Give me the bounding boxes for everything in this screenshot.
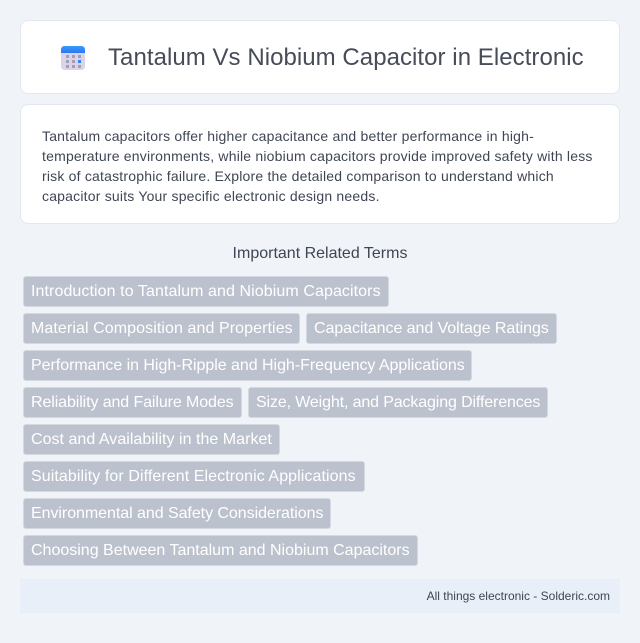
tag [23, 424, 280, 455]
tag [23, 387, 242, 418]
header panel [20, 20, 620, 94]
tag [248, 387, 548, 418]
tag: Choosing Between Tantalum and Niobium Capacitors [31, 542, 410, 559]
tag [23, 350, 472, 381]
footer credit: All things electronic - Solderic.com [427, 589, 610, 603]
intro paragraph: capacitor suits Your specific electronic design needs. [42, 188, 380, 204]
icon: calendar grid [61, 46, 85, 70]
tag [23, 498, 331, 529]
tag: Cost and Availability in the Market [31, 431, 272, 448]
tag: Environmental and Safety Considerations [31, 505, 323, 522]
intro paragraph: risk of catastrophic failure. Explore the detailed comparison to understand which [42, 168, 554, 184]
tag: Material Composition and Properties [31, 320, 293, 337]
tag [306, 313, 557, 344]
tag [23, 535, 418, 566]
section heading: Important Related Terms [233, 245, 407, 262]
title: Tantalum Vs Niobium Capacitor in Electronic [108, 44, 584, 71]
tag [23, 461, 365, 492]
footer bar [20, 579, 620, 613]
intro paragraph [42, 128, 593, 204]
tag [23, 276, 389, 307]
tag: Reliability and Failure Modes [31, 394, 234, 411]
related terms tag list [23, 276, 557, 566]
tag: Capacitance and Voltage Ratings [314, 320, 549, 337]
intro text panel [20, 104, 620, 224]
intro paragraph: temperature environments, while niobium capacitors provide improved safety with less [42, 148, 593, 164]
intro paragraph: Tantalum capacitors offer higher capacitance and better performance in high- [42, 128, 534, 144]
tag: Introduction to Tantalum and Niobium Capacitors [31, 283, 381, 300]
tag: Performance in High-Ripple and High-Frequency Applications [31, 357, 465, 374]
tag: Size, Weight, and Packaging Differences [256, 394, 540, 411]
tag: Suitability for Different Electronic Applications [31, 468, 356, 485]
tag [23, 313, 300, 344]
